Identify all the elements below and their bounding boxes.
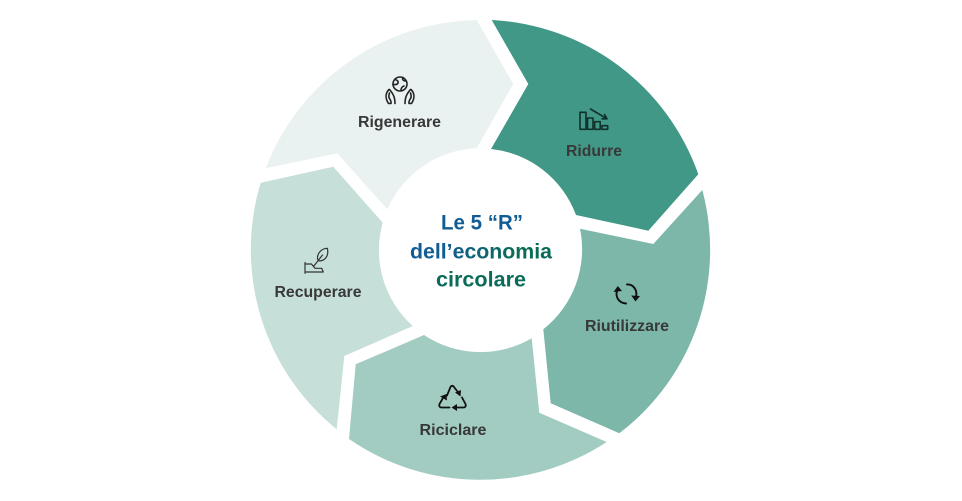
icon: recycling triangle — [439, 386, 466, 411]
center title: circolare — [436, 268, 526, 292]
segment: Riciclare — [349, 335, 607, 480]
center title — [410, 212, 552, 292]
icon: hands holding globe — [386, 77, 414, 104]
label: Ridurre: Ridurre — [566, 143, 622, 160]
label: Riutilizzare: Riutilizzare — [585, 318, 669, 335]
segment: Recuperare — [251, 167, 413, 429]
center title: Le 5 “R” — [441, 212, 523, 234]
segment: Riutilizzare — [543, 190, 710, 433]
label: Rigenerare: Rigenerare — [358, 114, 441, 131]
center title: dell’economia — [410, 240, 552, 264]
segment: Rigenerare — [266, 20, 513, 209]
icon: refresh arrows — [614, 284, 640, 304]
icon: descending bars with arrow — [580, 109, 608, 129]
icon: hand with leaf — [305, 248, 328, 273]
segment: Ridurre — [491, 20, 698, 231]
label: Riciclare: Riciclare — [420, 422, 487, 439]
label: Recuperare: Recuperare — [274, 284, 362, 301]
